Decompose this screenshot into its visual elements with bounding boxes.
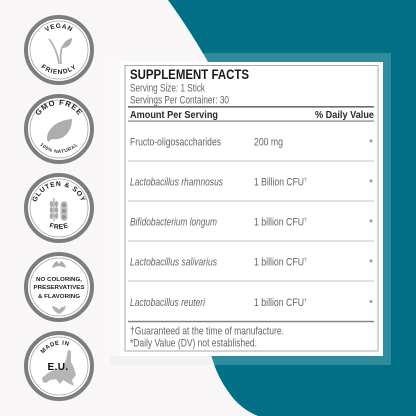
table header: [130, 109, 374, 121]
footnotes: [130, 326, 284, 350]
row: lactobacillus reuteri: 1 billion CFU: [254, 297, 304, 309]
text: serving size: Serving Size: 1 Stick: [130, 82, 205, 94]
label: made in: MADE IN: [40, 340, 70, 354]
row: lactobacillus reuteri: *: [369, 298, 373, 310]
label: no coloring: NO COLORING,: [36, 277, 83, 283]
badge: vegan friendly: [24, 15, 94, 85]
row: fructo-oligosaccharides: Fructo-oligosaccharides: [130, 136, 221, 148]
label: 100% natural: 100% NATURAL: [40, 143, 78, 153]
row: lactobacillus reuteri: †: [304, 298, 307, 304]
badge: gluten and soy free: [24, 173, 94, 243]
row: lactobacillus rhamnosus: Lactobacillus rhamnosus: [130, 176, 223, 188]
icon: europe map: [42, 350, 76, 386]
row: lactobacillus reuteri: Lactobacillus reuteri: [130, 297, 205, 309]
label: gmo free: GMO FREE: [36, 100, 82, 115]
row: lactobacillus salivarius: †: [304, 258, 307, 264]
row: lactobacillus salivarius: 1 billion CFU: [254, 256, 304, 268]
label: gluten and soy: GLUTEN & SOY: [32, 181, 86, 202]
row: fructo-oligosaccharides: [130, 136, 373, 149]
footnotes: *Daily Value (DV) not established.: [130, 338, 257, 350]
row: bifidobacterium longum: †: [304, 218, 307, 224]
icon: top leaves: [52, 261, 66, 268]
row: bifidobacterium longum: 1 billion CFU: [254, 216, 304, 228]
table header: Amount Per Serving: [130, 109, 218, 121]
table header: % Daily Value: [315, 109, 374, 121]
label: free: FREE: [50, 222, 68, 230]
row: bifidobacterium longum: Bifidobacterium longum: [130, 216, 217, 228]
translucent panel behind card: [104, 53, 391, 365]
label: e.u.: E.U.: [47, 362, 69, 373]
footnotes: †Guaranteed at the time of manufacture.: [130, 326, 284, 338]
background: off-white curved shape: [0, 0, 258, 416]
badge: no coloring: [26, 254, 92, 320]
panel: supplement facts card: [120, 62, 383, 356]
row: lactobacillus rhamnosus: [130, 176, 373, 189]
label: vegan: VEGAN: [44, 23, 73, 32]
heading: supplement facts: SUPPLEMENT FACTS: [130, 67, 249, 82]
row: lactobacillus rhamnosus: 1 Billion CFU: [254, 176, 304, 188]
badge: made in eu: [24, 331, 94, 401]
icon: bottom leaves: [52, 306, 66, 314]
row: lactobacillus salivarius: Lactobacillus salivarius: [130, 256, 217, 268]
icon: wheat and soy: [50, 198, 68, 221]
row: lactobacillus rhamnosus: †: [304, 178, 307, 184]
row: fructo-oligosaccharides: 200 mg: [254, 136, 283, 148]
row: lactobacillus salivarius: *: [369, 258, 373, 269]
label: preservatives: PRESERVATIVES: [34, 285, 85, 291]
label: and flavoring: & FLAVORING: [38, 294, 80, 300]
row: lactobacillus salivarius: [130, 256, 373, 269]
icon: v leaf: [49, 38, 72, 63]
row: fructo-oligosaccharides: *: [369, 138, 373, 149]
soft shadow under card on off-white: [110, 356, 214, 365]
row: lactobacillus reuteri: [130, 297, 373, 310]
icon: leaf: [47, 119, 72, 142]
row: lactobacillus rhamnosus: *: [369, 178, 373, 189]
text: servings per container: Servings Per Container: 30: [130, 94, 229, 106]
row: bifidobacterium longum: [130, 216, 373, 229]
label: friendly: FRIENDLY: [41, 64, 75, 74]
row: bifidobacterium longum: *: [369, 218, 373, 229]
badge: gmo free: [24, 94, 94, 164]
